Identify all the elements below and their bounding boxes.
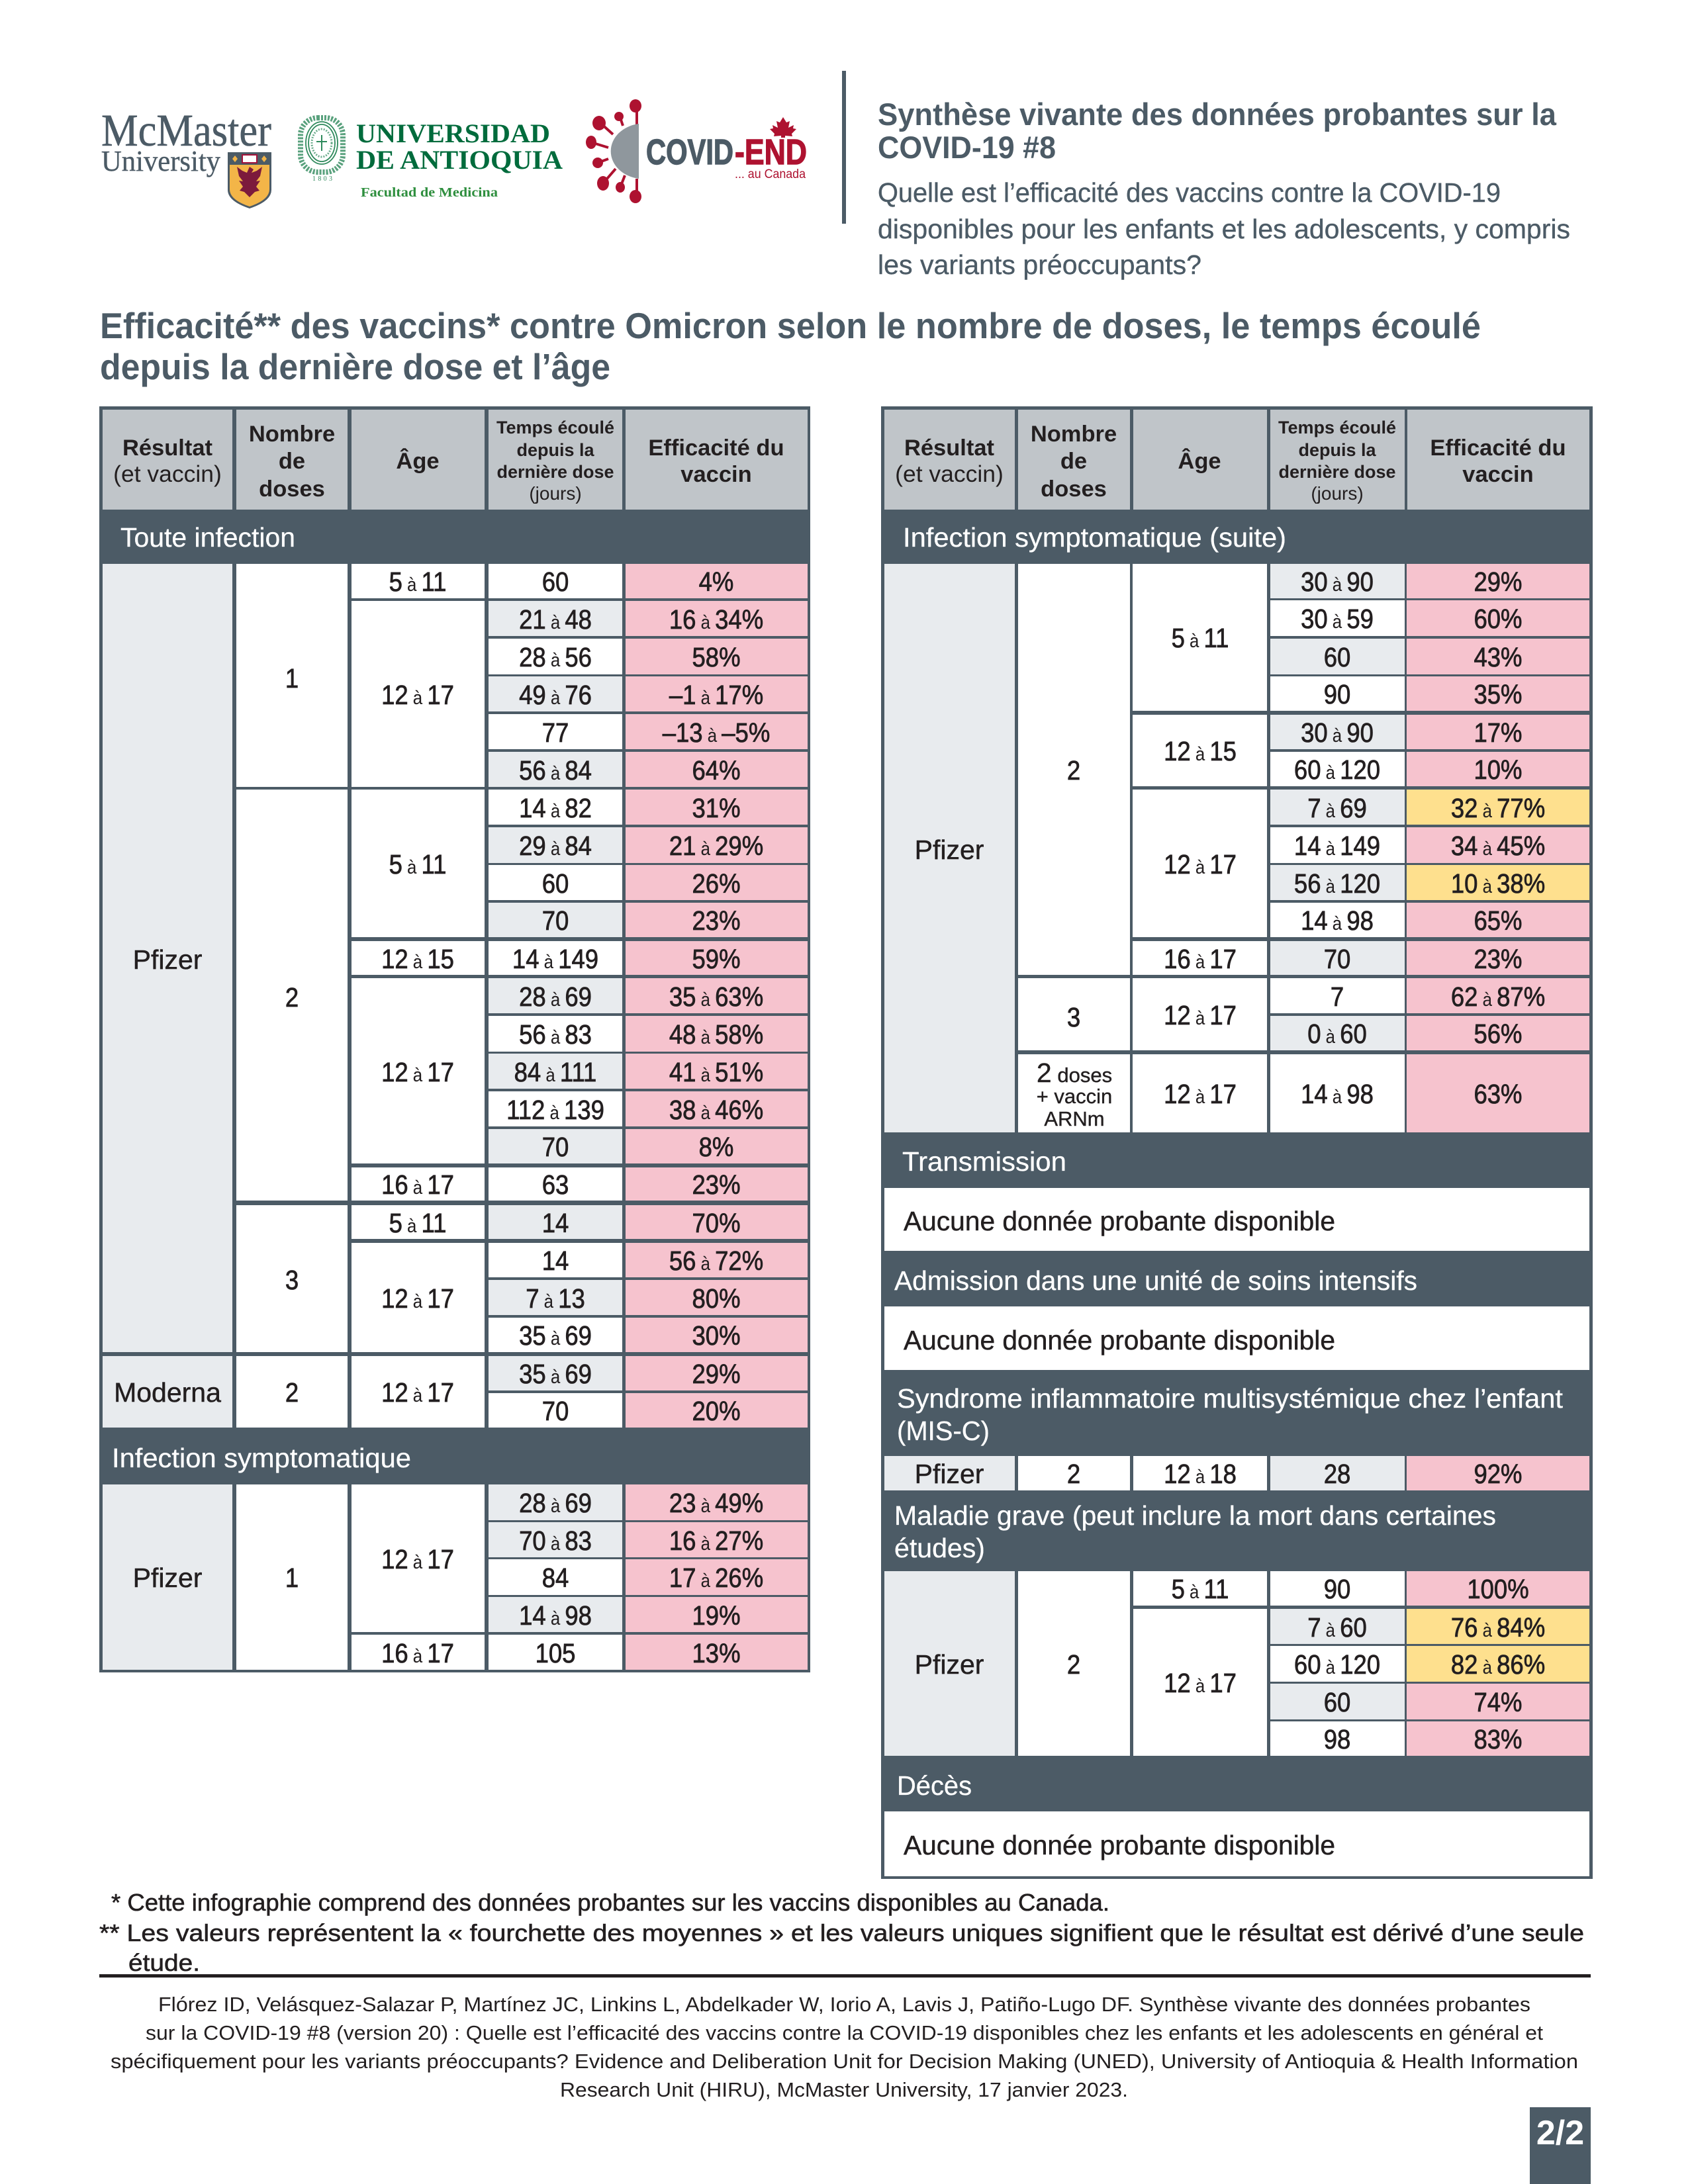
vaccine: Pfizer: Pfizer	[915, 835, 984, 865]
citation: Flórez ID, Velásquez-Salazar P, Martínez JC, Linkins L, Abdelkader W, Iorio A, Lavis J, Patiño-Lugo DF. Synthèse vivante des données probantes	[158, 1993, 1530, 2016]
header title block: Quelle est l’efficacité des vaccins contre la COVID-19	[878, 177, 1501, 208]
column headers: Nombre	[249, 422, 335, 447]
rows: time and efficacy, Toute infection Pfizer: 14 à 82	[519, 794, 592, 824]
logo: Universidad de Antioquia: Facultad de Medicina	[361, 185, 498, 200]
header title block	[878, 97, 1570, 280]
vaccine block: Pfizer, Infection symptomatique: 70 à 83	[519, 1526, 592, 1557]
section: Syndrome inflammatoire multisystémique: 28	[1324, 1459, 1350, 1490]
logo: COVID-END au Canada	[586, 99, 807, 203]
rows: time and efficacy, Toute infection Pfizer: 29 à 84	[519, 831, 592, 862]
vaccine block: Moderna	[103, 1356, 808, 1428]
age cells: 16 à 17	[381, 1170, 454, 1201]
age cells: 5 à 11	[389, 567, 446, 598]
section: Maladie grave: 83%	[1474, 1725, 1523, 1755]
rows: time and efficacy: 70	[1324, 944, 1350, 975]
doses: 3: 3	[285, 1265, 299, 1296]
section: Maladie grave: 60	[1324, 1688, 1350, 1718]
section: Transmission	[884, 1146, 1589, 1251]
doses: 1: 1	[285, 664, 299, 694]
vaccine block: Pfizer, Infection symptomatique	[103, 1484, 808, 1670]
rows: time and efficacy: 65%	[1474, 906, 1523, 936]
header title block: Synthèse vivante des données probantes sur la	[878, 97, 1557, 132]
rows: time and efficacy, Toute infection Pfizer: 35 à 69	[519, 1321, 592, 1351]
age cells: 5 à 11	[389, 1208, 446, 1239]
column headers: doses	[1041, 477, 1107, 502]
vaccine: Pfizer	[884, 564, 1015, 1132]
rows: time and efficacy, Toute infection Pfizer: 56 à 84	[519, 756, 592, 786]
rows: time and efficacy: 60%	[1474, 604, 1523, 635]
section: Maladie grave: 90	[1324, 1574, 1350, 1605]
rows: time and efficacy: 60	[1324, 643, 1350, 673]
vaccine: Pfizer: Pfizer	[133, 944, 202, 975]
column headers: (jours)	[1311, 483, 1364, 504]
section: Admission dans une unité de soins intensifs: Admission dans une unité de soins intensifs	[894, 1265, 1417, 1296]
column headers: Temps écoulé	[1278, 418, 1396, 437]
section: Décès: Aucune donnée probante disponible	[904, 1830, 1335, 1860]
column headers: Efficacité du	[1430, 435, 1566, 461]
rows: time and efficacy, Toute infection Pfizer: 64%	[692, 756, 741, 786]
rows: time and efficacy: 23%	[1474, 944, 1523, 975]
section: Syndrome inflammatoire multisystémique: Syndrome inflammatoire multisystémique chez l’enfant	[897, 1383, 1564, 1414]
rows: time and efficacy, Toute infection Pfizer: 60	[542, 567, 569, 598]
column headers: Résultat	[122, 435, 213, 461]
rows: time and efficacy, Toute infection Pfizer: 21 à 29%	[669, 831, 763, 862]
column headers: dernière dose	[496, 462, 614, 482]
section: Transmission: Transmission	[902, 1146, 1066, 1177]
vaccine block: Pfizer, Infection symptomatique: 12 à 17	[381, 1545, 454, 1575]
section: Syndrome inflammatoire multisystémique: 2	[1067, 1459, 1080, 1490]
rows: time and efficacy, Toute infection Pfizer: 60	[542, 869, 569, 899]
doses: 3: 3	[1067, 1003, 1080, 1033]
rows: time and efficacy: 14 à 98	[1301, 1079, 1374, 1110]
section: Maladie grave: 2	[1067, 1650, 1080, 1680]
doses: 2 doses + vaccin ARNm	[1018, 1054, 1130, 1132]
logo: McMaster University: University	[101, 145, 220, 177]
age cells: 12 à 17	[1164, 850, 1237, 880]
footer rule	[99, 1974, 1591, 1978]
rows: time and efficacy, Toute infection Pfizer: 23%	[692, 1170, 741, 1201]
rows: time and efficacy, Toute infection Pfizer: 14	[542, 1246, 569, 1277]
rows: time and efficacy: 32 à 77%	[1451, 794, 1545, 824]
logo: Universidad de Antioquia: 1803	[312, 175, 332, 183]
age cells	[352, 564, 485, 1352]
rows: time and efficacy: 35%	[1474, 680, 1523, 710]
rows: time and efficacy: 30 à 90	[1301, 718, 1374, 749]
column headers: vaccin	[680, 462, 752, 487]
rows: time and efficacy, Toute infection Pfizer: 26%	[692, 869, 741, 899]
vaccine block: Pfizer, Infection symptomatique: 84	[542, 1563, 569, 1594]
rows: time and efficacy, Toute infection Pfizer: –1 à 17%	[669, 680, 763, 711]
rows: time and efficacy, Toute infection Pfizer: 59%	[692, 944, 741, 975]
vaccine block: Pfizer, Infection symptomatique: 13%	[692, 1639, 741, 1669]
section heading: Toute infection: Toute infection	[120, 522, 295, 553]
rows: time and efficacy, Toute infection Pfizer: 30%	[692, 1321, 741, 1351]
doses: 2: 2	[1067, 756, 1080, 786]
header title block: les variants préoccupants?	[878, 250, 1201, 280]
age cells: 12 à 17	[381, 1058, 454, 1088]
vaccine block: Moderna: 12 à 17	[381, 1378, 454, 1408]
doses: 2 doses + vaccin ARNm: 2 doses	[1037, 1058, 1112, 1088]
rows: time and efficacy: 56 à 120	[1294, 869, 1380, 899]
vaccine block: Moderna: 29%	[692, 1359, 741, 1390]
section: Syndrome inflammatoire multisystémique: 12 à 18	[1164, 1459, 1237, 1490]
column headers: doses	[259, 477, 325, 502]
section: Admission dans une unité de soins intensifs	[884, 1265, 1589, 1370]
age cells: 12 à 17	[1164, 1079, 1237, 1110]
doses: 2	[236, 790, 348, 1201]
column headers: vaccin	[1462, 462, 1534, 487]
rows: time and efficacy: 63%	[1474, 1079, 1523, 1110]
rows: time and efficacy: 30 à 59	[1301, 604, 1374, 635]
vaccine block: Pfizer, Infection symptomatique: 16 à 17	[381, 1639, 454, 1669]
age cells: 12 à 17	[1164, 1001, 1237, 1031]
rows: time and efficacy, Toute infection Pfizer: 28 à 56	[519, 643, 592, 673]
vaccine block: Moderna: Moderna	[114, 1377, 221, 1408]
rows: time and efficacy, Toute infection Pfizer: 80%	[692, 1284, 741, 1314]
rows: time and efficacy, Toute infection Pfizer: 23%	[692, 906, 741, 936]
rows: time and efficacy: 60 à 120	[1294, 755, 1380, 786]
rows: time and efficacy, Toute infection Pfizer: 8%	[699, 1132, 733, 1163]
footnotes: * Cette infographie comprend des données probantes sur les vaccins disponibles au Canada.	[111, 1889, 1109, 1916]
section: Maladie grave: 74%	[1474, 1688, 1523, 1718]
header: logos	[101, 99, 807, 208]
section: Maladie grave: 76 à 84%	[1451, 1613, 1545, 1643]
main heading: Efficacité** des vaccins* contre Omicron selon le nombre de doses, le temps écoulé	[100, 305, 1481, 346]
column headers: de	[1060, 449, 1087, 474]
vaccine block: Moderna: 70	[542, 1396, 569, 1427]
section heading: Infection symptomatique (suite): Infection symptomatique (suite)	[903, 522, 1286, 553]
rows: time and efficacy: 14 à 149	[1294, 831, 1380, 862]
column headers: Nombre	[1031, 422, 1117, 447]
logo: COVID-END au Canada: COVID	[646, 132, 733, 172]
rows: time and efficacy, Toute infection Pfizer: 14	[542, 1208, 569, 1239]
logo: McMaster University: McMaster	[101, 105, 271, 156]
rows: time and efficacy	[1270, 564, 1589, 1132]
rows: time and efficacy: 90	[1324, 680, 1350, 710]
section: Maladie grave: 5 à 11	[1172, 1574, 1229, 1605]
column headers: Âge	[396, 447, 440, 474]
column headers: depuis la	[516, 440, 594, 460]
rows: time and efficacy: 10%	[1474, 755, 1523, 786]
citation: sur la COVID-19 #8 (version 20) : Quelle est l’efficacité des vaccins contre la COVID-19 disponibles chez les enfants et les adolescents en général et	[146, 2021, 1543, 2044]
section: Maladie grave: Pfizer	[915, 1649, 984, 1680]
rows: time and efficacy: 17%	[1474, 718, 1523, 749]
doses: 2: 2	[285, 983, 299, 1013]
vaccine block: Pfizer, Infection symptomatique: 23 à 49%	[669, 1488, 763, 1519]
logo: Universidad de Antioquia: DE ANTIOQUIA	[356, 145, 563, 175]
rows: time and efficacy, Toute infection Pfizer: 38 à 46%	[669, 1095, 763, 1126]
column headers: (et vaccin)	[113, 461, 222, 487]
age cells: 12 à 15	[381, 944, 454, 975]
section: Maladie grave: 98	[1324, 1725, 1350, 1755]
section: Syndrome inflammatoire multisystémique	[884, 1383, 1589, 1490]
citation	[111, 1993, 1578, 2101]
rows: time and efficacy, Toute infection Pfizer: 41 à 51%	[669, 1058, 763, 1088]
rows: time and efficacy: 0 à 60	[1307, 1019, 1367, 1050]
rows: time and efficacy, Toute infection Pfizer: 70	[542, 1132, 569, 1163]
vaccine block: Pfizer, Infection symptomatique: 105	[536, 1639, 575, 1669]
doses: 2 doses + vaccin ARNm: + vaccin	[1037, 1085, 1112, 1108]
age cells: 12 à 17	[381, 680, 454, 711]
column headers: Âge	[1178, 447, 1221, 474]
rows: time and efficacy: 14 à 98	[1301, 906, 1374, 936]
age cells: 16 à 17	[1164, 944, 1237, 975]
section: Décès: Décès	[897, 1770, 972, 1801]
section: Syndrome inflammatoire multisystémique: Pfizer	[915, 1459, 984, 1489]
vaccine block: Pfizer, Infection symptomatique: 14 à 98	[519, 1601, 592, 1631]
citation: spécifiquement pour les variants préoccupants? Evidence and Deliberation Unit for Decision Making (UNED), University of Antioquia & Health Information	[111, 2050, 1578, 2073]
rows: time and efficacy, Toute infection Pfizer: 4%	[699, 567, 733, 598]
section: Maladie grave	[884, 1500, 1589, 1756]
column headers: Résultat	[904, 435, 995, 461]
section: Maladie grave: 12 à 17	[1164, 1668, 1237, 1699]
rows: time and efficacy: 29%	[1474, 567, 1523, 598]
main heading	[100, 305, 1481, 387]
rows: time and efficacy: 7 à 69	[1307, 794, 1367, 824]
doses: 2 doses + vaccin ARNm: ARNm	[1044, 1107, 1105, 1130]
age cells: 12 à 15	[1164, 737, 1237, 767]
logo: COVID-END au Canada: -END	[735, 132, 807, 172]
footnotes: étude.	[128, 1949, 200, 1976]
logo: COVID-END au Canada: ... au Canada	[735, 167, 806, 181]
main heading: depuis la dernière dose et l’âge	[100, 346, 610, 387]
vaccine block: Pfizer, Infection symptomatique: 19%	[692, 1601, 741, 1631]
panel: right table	[881, 406, 1593, 1879]
rows: time and efficacy, Toute infection Pfizer: 16 à 34%	[669, 605, 763, 635]
rows: time and efficacy: 56%	[1474, 1019, 1523, 1050]
logo: McMaster University	[101, 105, 271, 208]
rows: time and efficacy, Toute infection Pfizer: 63	[542, 1170, 569, 1201]
header title block: COVID-19 #8	[878, 130, 1056, 165]
column headers	[103, 410, 808, 510]
vaccine block: Pfizer, Infection symptomatique: 17 à 26%	[669, 1563, 763, 1594]
footnotes	[99, 1889, 1584, 1976]
rows: time and efficacy, Toute infection Pfizer: 56 à 83	[519, 1020, 592, 1050]
panel: left table	[99, 406, 810, 1672]
column headers: depuis la	[1298, 440, 1376, 460]
rows: time and efficacy, Toute infection Pfizer: 58%	[692, 643, 741, 673]
vaccine: Pfizer	[103, 564, 232, 1352]
vaccine block: Pfizer, Infection symptomatique: 28 à 69	[519, 1488, 592, 1519]
section: Transmission: Aucune donnée probante disponible	[904, 1206, 1335, 1236]
citation: Research Unit (HIRU), McMaster University, 17 janvier 2023.	[560, 2078, 1128, 2101]
footnotes: ** Les valeurs représentent la « fourchette des moyennes » et les valeurs uniques signifient que le résultat est dérivé d’une seule	[99, 1919, 1584, 1946]
section: Maladie grave: 7 à 60	[1307, 1613, 1367, 1643]
section: Admission dans une unité de soins intensifs: Aucune donnée probante disponible	[904, 1325, 1335, 1355]
doses: 3	[236, 1205, 348, 1352]
vaccine block: Moderna: 20%	[692, 1396, 741, 1427]
rows: time and efficacy, Toute infection Pfizer: 70	[542, 906, 569, 936]
rows: time and efficacy: 30 à 90	[1301, 567, 1374, 598]
rows: time and efficacy: 7	[1331, 982, 1344, 1013]
section: Maladie grave: 60 à 120	[1294, 1650, 1380, 1680]
age cells	[1133, 564, 1267, 1132]
section: Maladie grave: Maladie grave (peut inclure la mort dans certaines	[894, 1500, 1496, 1531]
rows: time and efficacy, Toute infection Pfizer	[489, 564, 808, 1352]
column headers: dernière dose	[1278, 462, 1396, 482]
section: Décès	[884, 1770, 1589, 1876]
vaccine block: Moderna: 35 à 69	[519, 1359, 592, 1390]
rows: time and efficacy, Toute infection Pfizer: 21 à 48	[519, 605, 592, 635]
vaccine block: Pfizer, Infection symptomatique: 16 à 27%	[669, 1526, 763, 1557]
header title block: disponibles pour les enfants et les adolescents, y compris	[878, 214, 1570, 244]
logo: Universidad de Antioquia	[301, 118, 563, 200]
vaccine block: Moderna: 2	[285, 1378, 299, 1408]
rows: time and efficacy: 43%	[1474, 643, 1523, 673]
age cells: 5 à 11	[389, 850, 446, 880]
page number tab	[1530, 2107, 1591, 2184]
section: Syndrome inflammatoire multisystémique: (MIS-C)	[897, 1416, 990, 1446]
page number tab: 2/2	[1536, 2114, 1584, 2152]
section: Maladie grave: 100%	[1467, 1574, 1529, 1605]
doses: 3	[1018, 978, 1130, 1050]
rows: time and efficacy, Toute infection Pfizer: 31%	[692, 794, 741, 824]
section: Syndrome inflammatoire multisystémique: 92%	[1474, 1459, 1523, 1490]
rows: time and efficacy: 62 à 87%	[1451, 982, 1545, 1013]
age cells: 5 à 11	[1172, 623, 1229, 654]
column headers: Efficacité du	[648, 435, 784, 461]
vaccine block: Pfizer, Infection symptomatique: Pfizer	[133, 1563, 202, 1593]
rows: time and efficacy, Toute infection Pfizer: 56 à 72%	[669, 1246, 763, 1277]
section: Maladie grave: 82 à 86%	[1451, 1650, 1545, 1680]
rows: time and efficacy: 34 à 45%	[1451, 831, 1545, 862]
rows: time and efficacy, Toute infection Pfizer: 77	[542, 718, 569, 749]
column headers: (et vaccin)	[895, 461, 1004, 487]
rows: time and efficacy, Toute infection Pfizer: 70%	[692, 1208, 741, 1239]
section heading: Infection symptomatique: Infection symptomatique	[112, 1443, 411, 1473]
column headers: (jours)	[529, 483, 582, 504]
logo: Universidad de Antioquia: UNIVERSIDAD	[356, 118, 550, 148]
column headers: Temps écoulé	[496, 418, 614, 437]
rows: time and efficacy, Toute infection Pfizer: 112 à 139	[506, 1095, 604, 1126]
rows: time and efficacy, Toute infection Pfizer: 35 à 63%	[669, 982, 763, 1013]
column headers	[884, 410, 1589, 510]
rows: time and efficacy: 10 à 38%	[1451, 869, 1545, 899]
rows: time and efficacy, Toute infection Pfizer: 14 à 149	[512, 944, 598, 975]
section: Maladie grave: études)	[894, 1533, 985, 1563]
rows: time and efficacy, Toute infection Pfizer: 49 à 76	[519, 680, 592, 711]
vaccine block: Pfizer, Infection symptomatique: 1	[285, 1563, 299, 1594]
doses: 2	[1018, 564, 1130, 975]
rows: time and efficacy, Toute infection Pfizer: –13 à –5%	[663, 718, 770, 749]
age cells: 12 à 17	[381, 1284, 454, 1314]
doses: 1	[236, 564, 348, 787]
column headers: de	[279, 449, 305, 474]
rows: time and efficacy, Toute infection Pfizer: 48 à 58%	[669, 1020, 763, 1050]
rows: time and efficacy, Toute infection Pfizer: 7 à 13	[526, 1284, 585, 1314]
rows: time and efficacy, Toute infection Pfizer: 84 à 111	[514, 1058, 596, 1088]
rows: time and efficacy, Toute infection Pfizer: 28 à 69	[519, 982, 592, 1013]
header divider	[842, 71, 846, 224]
